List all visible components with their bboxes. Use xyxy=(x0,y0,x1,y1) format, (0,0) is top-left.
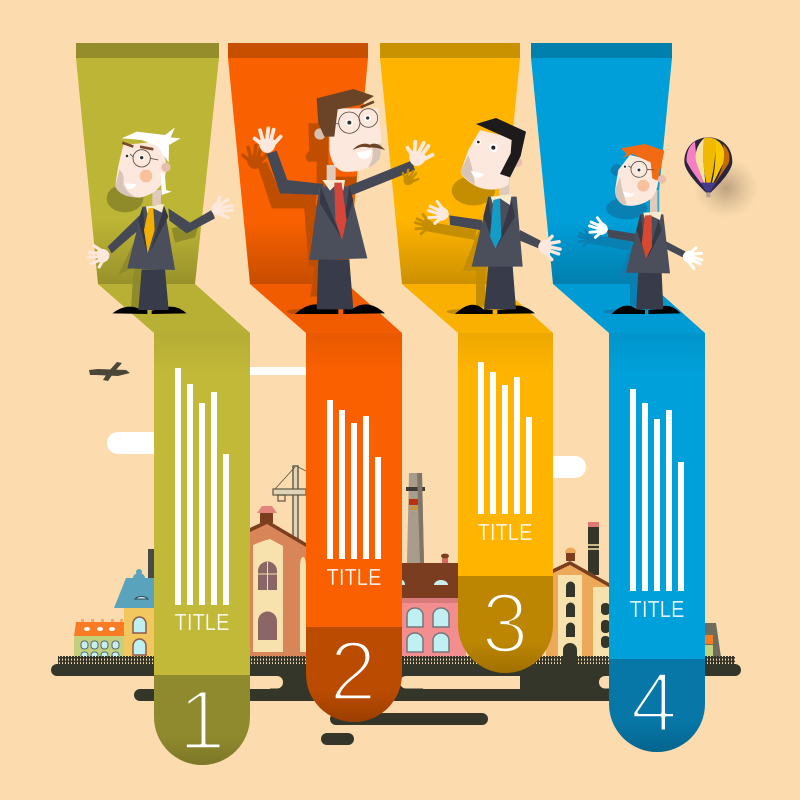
hair xyxy=(317,89,374,137)
city skyline xyxy=(51,362,741,745)
hair xyxy=(476,118,526,177)
jacket xyxy=(127,207,175,270)
left arm and hand xyxy=(426,200,483,231)
bar chart 3 xyxy=(478,362,532,514)
tie xyxy=(642,215,652,259)
head xyxy=(461,130,513,190)
glasses xyxy=(628,161,654,177)
ribbon 4 blue xyxy=(531,43,705,752)
head xyxy=(615,155,658,206)
left arm and hand xyxy=(87,215,142,268)
ear xyxy=(658,175,666,184)
neck xyxy=(650,190,658,214)
icon: airplane xyxy=(89,362,130,381)
mouth xyxy=(125,183,136,189)
eyes xyxy=(623,165,642,173)
hair xyxy=(621,144,664,181)
road shapes xyxy=(51,664,741,745)
cast shadow 3 xyxy=(399,167,495,314)
balloon shadow xyxy=(694,158,758,218)
moustache xyxy=(353,144,384,149)
bar chart 1 xyxy=(175,368,229,605)
orange factory xyxy=(546,522,611,664)
trousers xyxy=(484,266,516,309)
eyebrows xyxy=(122,143,153,149)
bar chart 4 xyxy=(630,389,684,591)
ribbon 2 number tab xyxy=(306,627,402,722)
brick hall xyxy=(250,506,306,657)
shoes xyxy=(112,307,187,314)
businessman 1 white hair xyxy=(87,127,235,314)
right arm and hand xyxy=(665,242,704,269)
number 1: 1 xyxy=(179,673,225,767)
ribbon 1 number tab xyxy=(154,675,250,765)
label 1: TITLE xyxy=(174,609,230,635)
jacket xyxy=(309,187,367,260)
businessman 2 brown hair xyxy=(243,89,435,314)
trousers xyxy=(636,273,663,309)
label 4: TITLE xyxy=(630,596,684,622)
tie xyxy=(490,198,501,248)
clouds xyxy=(107,367,586,478)
cast shadow 2 xyxy=(243,123,357,314)
fence xyxy=(58,656,735,664)
businessman 3 black hair xyxy=(399,118,561,314)
left arm and hand xyxy=(588,217,637,242)
shoes xyxy=(295,304,385,314)
number 2: 2 xyxy=(330,624,376,718)
bar chart 2 xyxy=(327,400,381,559)
collar xyxy=(491,194,512,205)
head xyxy=(115,142,166,198)
factory chimney xyxy=(406,473,425,563)
ribbon 4 number tab xyxy=(609,659,705,752)
right arm and hand xyxy=(347,138,435,196)
right arm and hand xyxy=(168,195,235,233)
neck xyxy=(499,177,509,197)
ribbon 3 yellow xyxy=(380,43,553,673)
pink house xyxy=(400,554,466,658)
ribbon 3 top band xyxy=(380,43,520,58)
number 3: 3 xyxy=(482,576,528,670)
ear xyxy=(314,128,326,140)
label 2: TITLE xyxy=(326,564,382,590)
cheek xyxy=(637,180,649,192)
mouth xyxy=(471,171,484,178)
eyes xyxy=(476,139,498,152)
left arm and hand xyxy=(255,128,323,195)
shoes xyxy=(455,305,535,314)
tie xyxy=(144,208,155,253)
far-right building xyxy=(700,623,721,657)
shoes xyxy=(612,306,681,314)
collar xyxy=(643,212,662,221)
cast shadow 1 xyxy=(107,184,200,313)
eyebrow xyxy=(361,102,374,107)
glasses xyxy=(331,109,378,133)
right arm and hand xyxy=(518,230,561,260)
collar xyxy=(322,180,345,191)
ribbon 4 top band xyxy=(531,43,672,58)
businessman 4 orange hair xyxy=(577,144,704,314)
collar xyxy=(146,204,164,213)
ear xyxy=(512,157,522,167)
glasses xyxy=(130,150,158,167)
mouth xyxy=(357,150,372,159)
hair xyxy=(122,127,181,195)
label 3: TITLE xyxy=(478,519,532,545)
ribbon 2 top band xyxy=(228,43,368,58)
ribbon 1 top band xyxy=(76,43,219,58)
mouth xyxy=(623,191,634,197)
icon: hot air balloon xyxy=(684,137,758,218)
ribbon 2 orange xyxy=(228,43,402,722)
head xyxy=(329,108,382,172)
eyes xyxy=(346,115,371,126)
cast shadow 4 xyxy=(577,164,647,314)
cheek xyxy=(140,170,152,182)
jacket xyxy=(472,197,523,267)
neck xyxy=(327,165,336,182)
small orange-roof house xyxy=(74,619,124,658)
ribbon 3 number tab xyxy=(458,576,553,673)
tie xyxy=(334,183,347,240)
jacket xyxy=(626,214,670,273)
trousers xyxy=(317,259,353,309)
neck xyxy=(152,190,161,205)
ribbon 1 olive xyxy=(76,43,250,767)
crane xyxy=(273,466,308,538)
eyes xyxy=(125,154,145,161)
trousers xyxy=(138,269,169,310)
ear xyxy=(161,163,171,172)
blue-roof house xyxy=(114,549,156,658)
number 4: 4 xyxy=(631,655,677,749)
